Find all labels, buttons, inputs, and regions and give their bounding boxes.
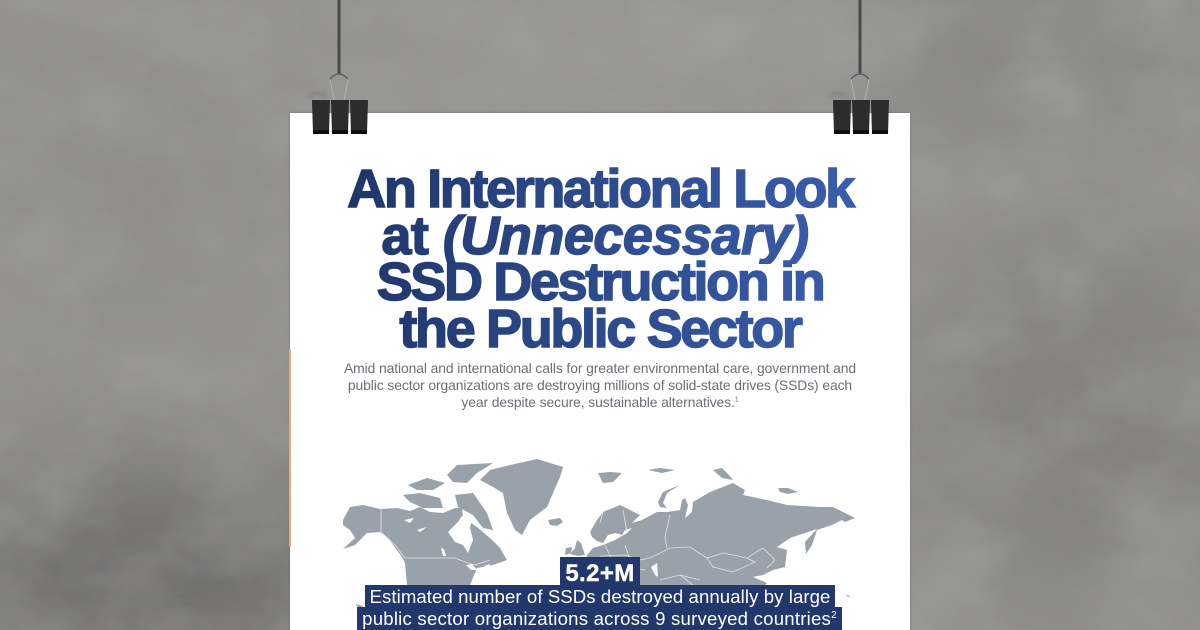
subtitle text: Amid national and international calls for greater environmental care, government and — [344, 360, 856, 376]
title — [347, 159, 856, 359]
title: An International Look — [347, 159, 853, 219]
title: at (Unnecessary) — [381, 206, 809, 266]
stat value: 5.2+M — [565, 560, 635, 587]
icon: left binder clip and hanging wire — [310, 0, 368, 134]
title: SSD Destruction in — [377, 252, 823, 312]
subtitle text: year despite secure, sustainable alternatives.1 — [461, 394, 739, 410]
stat description line 1: Estimated number of SSDs destroyed annually by large — [370, 586, 830, 607]
stat description line 2: public sector organizations across 9 surveyed countries2 — [362, 608, 837, 629]
lakes and caspian — [404, 518, 658, 577]
title: the Public Sector — [399, 299, 801, 359]
icon: right binder clip and hanging wire — [830, 0, 889, 134]
hudson bay — [448, 516, 473, 553]
world map — [343, 459, 855, 607]
paper edge highlight — [289, 349, 291, 547]
subtitle text: public sector organizations are destroying millions of solid-state drives (SSDs) each — [348, 377, 852, 393]
subtitle text — [344, 360, 856, 410]
paper poster — [290, 113, 910, 630]
